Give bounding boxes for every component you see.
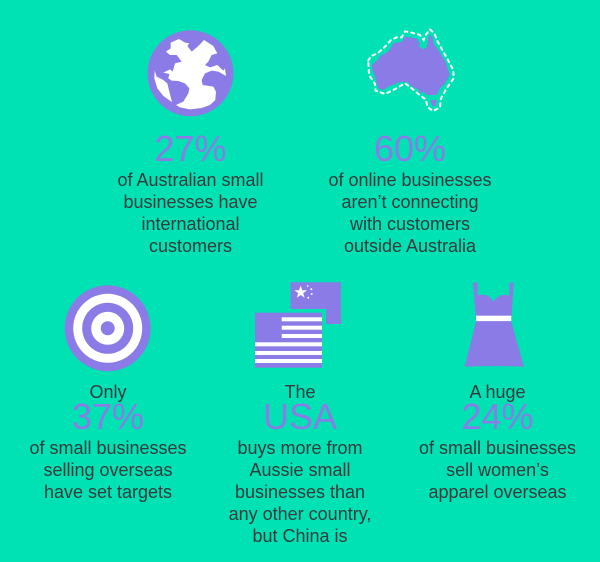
text: The: The <box>284 382 316 402</box>
text: online businesses description: aren’t connecting <box>341 192 479 212</box>
text: apparel description: apparel overseas <box>428 482 567 502</box>
text: targets description: selling overseas <box>43 460 173 480</box>
icon: globe <box>148 30 234 116</box>
icon: USA flag <box>255 313 322 368</box>
text: Only: Only <box>89 382 126 402</box>
text: targets description: have set targets <box>44 482 172 502</box>
text: international customers description <box>117 170 264 256</box>
icon: China flag <box>291 282 341 324</box>
text: online businesses description: outside Australia <box>344 236 476 256</box>
text: international customers description: businesses have <box>123 192 258 212</box>
text: USA description: buys more from <box>237 438 363 458</box>
text: international customers description: customers <box>149 236 232 256</box>
text: targets description <box>29 438 187 502</box>
stat: Only 37% set targets <box>29 382 187 502</box>
dress waist band <box>476 316 511 321</box>
text: USA description <box>229 438 371 546</box>
text: USA description: Aussie small <box>249 460 351 480</box>
icon: target <box>65 285 151 371</box>
figure: 37%: 37% <box>72 396 144 437</box>
text: USA description: any other country, <box>229 504 371 524</box>
icon: flags of USA and China <box>255 282 341 368</box>
icon: dress <box>465 283 524 367</box>
figure: 27%: 27% <box>154 128 227 169</box>
text: targets description: of small businesses <box>29 438 187 458</box>
text: international customers description: of Australian small <box>117 170 264 190</box>
figure: USA: USA <box>263 396 337 437</box>
text: apparel description: sell women’s <box>446 460 549 480</box>
figure: 60%: 60% <box>374 128 446 169</box>
text: apparel description <box>419 438 576 502</box>
stat: A huge 24% women's apparel <box>419 382 576 502</box>
stat: USA buys more <box>229 382 371 546</box>
text: online businesses description: with customers <box>350 214 470 234</box>
figure: 24%: 24% <box>461 396 534 437</box>
text: online businesses description: of online businesses <box>328 170 492 190</box>
text: USA description: businesses than <box>235 482 365 502</box>
text: USA description: but China is <box>252 526 348 546</box>
text: international customers description: international <box>141 214 240 234</box>
icon: Australia map <box>368 29 454 111</box>
stat: 27% international customers <box>117 128 264 256</box>
stat: 60% online businesses <box>328 128 492 256</box>
text: apparel description: of small businesses <box>419 438 576 458</box>
text: online businesses description <box>328 170 492 256</box>
text: A huge: A huge <box>469 382 526 402</box>
